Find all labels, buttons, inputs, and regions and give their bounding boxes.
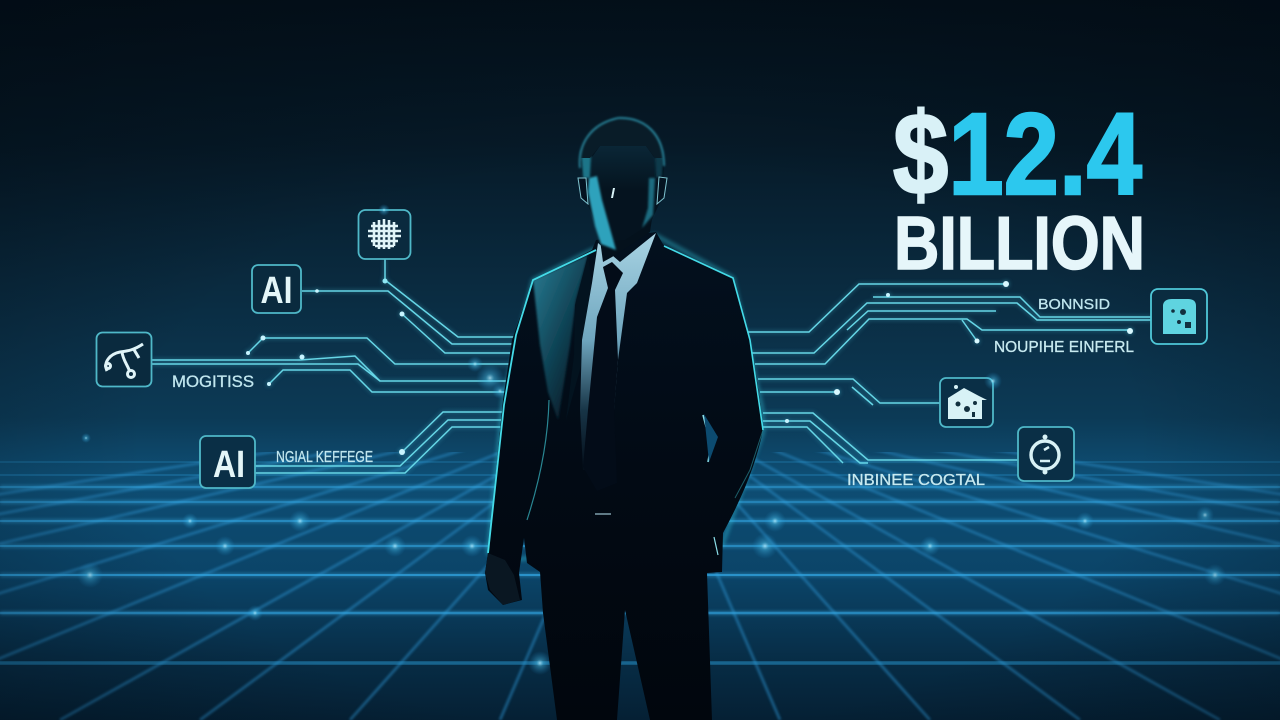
icon: AI badge lower	[200, 436, 255, 488]
lit cheek and neck	[588, 176, 616, 250]
label: MOGITISS: MOGITISS	[172, 373, 254, 391]
circuit lines: left	[152, 259, 520, 473]
right cheek light	[642, 178, 655, 228]
energy sparks near figure	[81, 356, 508, 443]
label: NOUPIHE EINFERL: NOUPIHE EINFERL	[994, 339, 1134, 356]
hair top	[580, 118, 664, 158]
icon: circuit board panel	[1151, 289, 1207, 344]
forehead	[590, 146, 656, 190]
ears	[578, 177, 667, 204]
hair side right	[655, 150, 663, 178]
hair rim light	[580, 118, 664, 168]
outer rim glow	[488, 235, 763, 560]
rim light strokes	[488, 246, 763, 555]
belt buckle	[595, 513, 611, 515]
lit jacket left panel	[533, 255, 588, 420]
icon: squiggle molecule	[96, 332, 152, 386]
neck shadow	[596, 205, 654, 262]
shirt	[580, 233, 656, 470]
right arm gap	[704, 414, 718, 462]
hair side left	[581, 150, 591, 178]
label: INBINEE COGTAL: INBINEE COGTAL	[847, 472, 985, 489]
icon: AI badge upper	[252, 265, 301, 313]
headline figure	[893, 89, 1145, 285]
glowing floor grid	[0, 452, 1280, 720]
icon: circular badge	[1018, 427, 1074, 481]
icon: house	[940, 372, 1002, 427]
circuit lines: right	[745, 281, 1152, 463]
unit word: BILLION	[894, 201, 1145, 285]
icon: AI badge upper: AI	[260, 270, 292, 312]
silhouetted businessman	[485, 118, 763, 720]
label: BONNSID: BONNSID	[1038, 296, 1110, 313]
lapel shadow	[566, 255, 592, 420]
icon: AI badge lower: AI	[213, 444, 245, 486]
label: NGIAL KEFFEGE: NGIAL KEFFEGE	[276, 449, 373, 466]
head shape	[579, 118, 664, 242]
dollar amount: $12.4	[893, 89, 1142, 219]
left hand	[485, 553, 520, 605]
body silhouette	[485, 232, 763, 720]
icon: chip grid	[358, 204, 410, 259]
head	[578, 118, 667, 262]
nose highlight	[611, 188, 615, 198]
necktie	[583, 262, 623, 491]
